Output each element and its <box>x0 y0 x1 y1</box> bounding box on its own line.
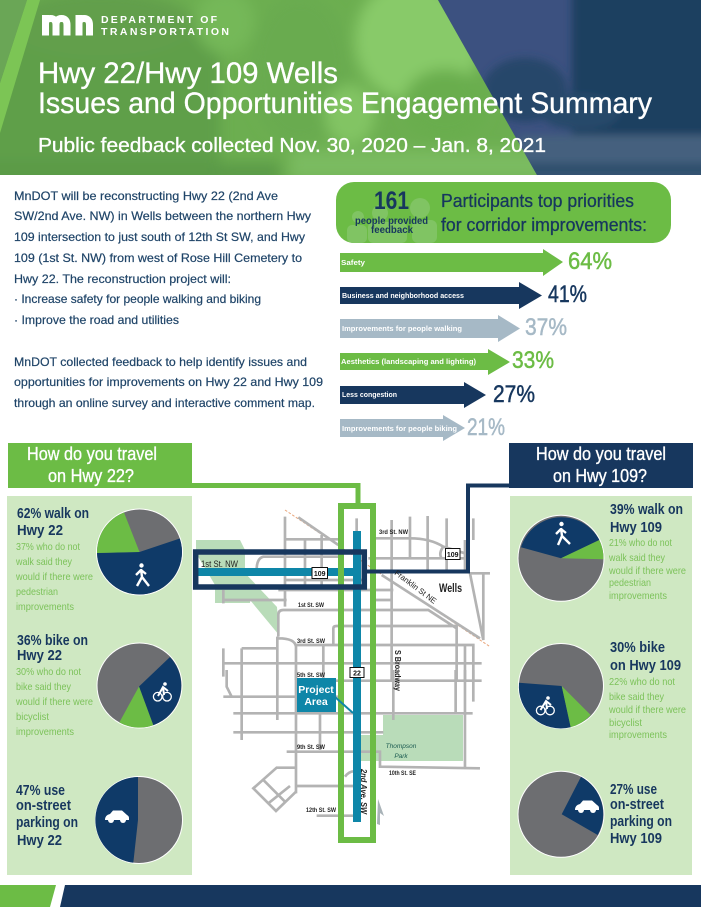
heading box: Hwy 22: on Hwy 22? <box>48 466 134 486</box>
arrow bar: Less congestion 27%: 27% <box>493 381 535 408</box>
pie chart: Hwy 22 biking <box>96 642 182 728</box>
intro text block: · Improve the road and utilities <box>14 313 179 327</box>
stat: 62% walk on Hwy 22: Hwy 22 <box>17 522 63 539</box>
stat: 47% on-street parking on Hwy 22 <box>16 782 78 849</box>
arrow bar: Aesthetics 33% <box>340 347 554 375</box>
map street labels: 3rd St. NW <box>379 529 409 536</box>
stat: 30% bike on Hwy 109: bicyclist <box>609 717 642 729</box>
stat: 62% walk on Hwy 22: pedestrian <box>16 586 58 598</box>
shield: 22: 22 <box>353 670 361 678</box>
stat: 39% walk on Hwy 109: improvements <box>609 590 667 602</box>
map street labels: 9th St. SW <box>297 744 326 751</box>
footer band <box>0 885 701 907</box>
intro text block: opportunities for improvements on Hwy 22 and Hwy 109 <box>14 375 323 389</box>
priorities heading: for corridor improvements: <box>441 215 647 235</box>
shield: 109 on 1st St <box>312 568 328 578</box>
arrow bar: Aesthetics 33%: 33% <box>512 347 554 374</box>
stat: 36% bike on Hwy 22: 36% bike on <box>17 632 88 649</box>
map street labels: 5th St. SW <box>297 672 326 679</box>
icon: mn arches <box>46 15 90 36</box>
panel: Hwy 109 background <box>510 496 692 875</box>
stat: 36% bike on Hwy 22 <box>15 632 93 738</box>
stat: 27% on-street parking on Hwy 109: Hwy 109 <box>610 830 662 847</box>
callout: project area <box>297 678 353 713</box>
stat: 30% bike on Hwy 109 <box>608 639 686 741</box>
stat: 36% bike on Hwy 22: 30% who do not <box>16 666 81 678</box>
pie chart: Hwy 22 parking <box>95 776 183 864</box>
heading box: Hwy 109: How do you travel <box>536 444 666 464</box>
heading box: Hwy 22: How do you travel <box>27 444 157 464</box>
map street labels: Franklin St NE <box>393 568 438 606</box>
intro text block: through an online survey and interactive comment map. <box>14 396 315 410</box>
icon: car <box>105 810 129 823</box>
stat: 62% walk on Hwy 22: 62% walk on <box>17 505 89 522</box>
stat: 47% on-street parking on Hwy 22: 47% use <box>16 782 65 799</box>
map roads upper <box>223 510 490 680</box>
people count: people provided <box>355 216 428 227</box>
heading box: Hwy 109 <box>509 443 693 488</box>
stat: 47% on-street parking on Hwy 22: on-street <box>16 797 71 814</box>
shield: 109 north east: 109 <box>447 552 459 559</box>
title: Issues and Opportunities Engagement Summary <box>38 87 652 120</box>
title <box>38 57 652 120</box>
arrow bar: Business and neighborhood access 41%: 41% <box>548 281 587 308</box>
stat: 36% bike on Hwy 22: bike said they <box>16 681 72 693</box>
logo: MnDOT Department of Transportation: DEPARTMENT OF <box>101 14 218 26</box>
map street labels: Wells <box>439 583 462 595</box>
pie chart: Hwy 109 biking <box>518 643 604 729</box>
intro text block: MnDOT collected feedback to help identify issues and <box>14 355 307 369</box>
pie chart: Hwy 22 walking <box>96 508 183 596</box>
stat: 62% walk on Hwy 22 <box>15 505 93 613</box>
stat: 47% on-street parking on Hwy 22: Hwy 22 <box>17 832 62 849</box>
icon: cyclist <box>153 682 171 701</box>
stat: 27% on-street parking on Hwy 109: parking on <box>610 813 672 830</box>
arrow bar: Safety 64%: Safety <box>341 258 366 267</box>
arrow bar: Improvements for people biking 21%: Improvements for people biking <box>342 424 457 433</box>
icon: walker <box>556 522 570 545</box>
stat: 30% bike on Hwy 109: 30% bike <box>610 639 665 656</box>
stat: 62% walk on Hwy 22: 37% who do not <box>16 541 80 553</box>
stat: 27% on-street parking on Hwy 109 <box>610 781 672 847</box>
map box: Hwy 22 corridor <box>341 506 373 840</box>
pie chart: Hwy 109 walking <box>518 515 604 602</box>
arrow bar: Less congestion 27%: Less congestion <box>342 390 397 399</box>
intro text block: 109 intersection to just south of 12th St SW, and Hwy <box>14 230 305 244</box>
highway 109 corridor line <box>198 568 360 576</box>
priorities heading: Participants top priorities <box>441 191 634 211</box>
stat: 30% bike on Hwy 109: improvements <box>609 729 667 741</box>
stat: 39% walk on Hwy 109: pedestrian <box>609 577 651 589</box>
icon: walker <box>136 563 149 586</box>
logo: MnDOT Department of Transportation: TRANSPORTATION <box>101 26 229 38</box>
stat: 30% bike on Hwy 109: on Hwy 109 <box>610 657 681 674</box>
intro text block <box>14 189 323 410</box>
pie chart: Hwy 109 parking <box>518 771 604 858</box>
icon: car <box>575 800 599 813</box>
map street labels: 10th St. SE <box>389 770 417 777</box>
heading box: Hwy 22 <box>8 443 192 488</box>
priorities heading <box>441 191 647 235</box>
arrow bar: Improvements for people biking 21%: 21% <box>467 414 505 441</box>
arrow bar: Safety 64%: 64% <box>568 248 612 275</box>
arrow bar: Improvements for people walking 37%: 37% <box>525 314 567 341</box>
heading box: Hwy 109: on Hwy 109? <box>553 466 647 486</box>
panel: Hwy 22 background <box>7 496 192 875</box>
stat: 36% bike on Hwy 22: bicyclist <box>16 711 49 723</box>
arrow bar: Business and neighborhood access 41%: Business and neighborhood access <box>342 291 464 300</box>
callout: project area: Project <box>298 684 334 696</box>
stat: 47% on-street parking on Hwy 22: parking on <box>16 814 78 831</box>
arrow bar: Business and neighborhood access 41% <box>340 281 587 309</box>
stat: 39% walk on Hwy 109: would if there were <box>608 565 686 577</box>
map <box>192 486 509 840</box>
shield: 109 north east <box>446 548 460 560</box>
arrow bar: Safety 64% <box>340 248 612 276</box>
stat: 27% on-street parking on Hwy 109: 27% use <box>610 781 657 798</box>
arrow bar: Improvements for people walking 37% <box>340 314 567 342</box>
intro text block: SW/2nd Ave. NW) in Wells between the northern Hwy <box>14 209 311 223</box>
callout: project area: Area <box>304 696 328 708</box>
panel: participant count and priorities heading <box>336 182 671 243</box>
map street labels: S Broadway <box>393 650 402 691</box>
icon: cyclist <box>536 696 554 715</box>
intro text block: MnDOT will be reconstructing Hwy 22 (2nd Ave <box>14 189 278 203</box>
stat: 30% bike on Hwy 109: bike said they <box>609 691 665 703</box>
title: Hwy 22/Hwy 109 Wells <box>38 57 338 90</box>
intro text block: · Increase safety for people walking and biking <box>14 292 261 306</box>
map street labels <box>201 529 462 815</box>
connector: Hwy 22 title to map box <box>192 486 358 505</box>
stat: 27% on-street parking on Hwy 109: on-street <box>610 796 664 813</box>
arrow bar: Improvements for people walking 37%: Improvements for people walking <box>342 324 462 333</box>
map street labels: Thompson <box>386 743 417 750</box>
arrow bar: Aesthetics 33%: Aesthetics (landscaping and lighting) <box>341 357 476 366</box>
stat: 62% walk on Hwy 22: improvements <box>16 601 74 613</box>
map street labels: 12th St. SW <box>306 807 337 814</box>
map street labels: 1st St. SW <box>298 602 325 609</box>
map street labels: 1st St. NW <box>201 559 238 570</box>
icon: people silhouettes <box>347 198 437 243</box>
subtitle: Public feedback collected Nov. 30, 2020 – Jan. 8, 2021 <box>38 135 546 157</box>
people count: feedback <box>371 225 413 236</box>
stat: 30% bike on Hwy 109: would if there were <box>608 704 686 716</box>
stat: 36% bike on Hwy 22: would if there were <box>15 696 93 708</box>
stat: 36% bike on Hwy 22: improvements <box>16 726 74 738</box>
stat: 39% walk on Hwy 109: 21% who do not <box>609 537 672 549</box>
map street labels: Park <box>394 753 408 760</box>
stat: 62% walk on Hwy 22: walk said they <box>15 556 73 568</box>
people count <box>355 187 428 236</box>
arrow bar: Less congestion 27% <box>340 381 535 408</box>
highway 22 corridor line <box>353 531 361 822</box>
stat: 39% walk on Hwy 109 <box>608 501 686 602</box>
people count: 161 <box>374 187 409 215</box>
map street labels: 3rd St. SW <box>297 638 326 645</box>
stat: 39% walk on Hwy 109: Hwy 109 <box>610 519 662 536</box>
intro text block: Hwy 22. The reconstruction project will: <box>14 272 231 286</box>
map street labels: 2nd Ave. SW <box>359 768 368 815</box>
shield: 109 on 1st St: 109 <box>314 571 326 578</box>
header banner with photo overlay <box>0 0 701 190</box>
stat: 30% bike on Hwy 109: 22% who do not <box>609 676 675 688</box>
map roads lower <box>223 670 482 816</box>
icon: north arrow <box>377 799 384 825</box>
stat: 39% walk on Hwy 109: walk said they <box>608 552 666 564</box>
connector: Hwy 109 title to map box <box>366 486 509 572</box>
arrow bar: Improvements for people biking 21% <box>340 414 505 441</box>
logo: MnDOT Department of Transportation <box>46 14 229 38</box>
stat: 36% bike on Hwy 22: Hwy 22 <box>17 647 62 664</box>
map box: Hwy 109 corridor <box>196 552 364 587</box>
map parks <box>196 540 463 761</box>
stat: 39% walk on Hwy 109: 39% walk on <box>610 501 683 518</box>
intro text block: 109 (1st St. NW) from west of Rose Hill Cemetery to <box>14 251 302 265</box>
shield: 22 <box>350 668 364 678</box>
stat: 62% walk on Hwy 22: would if there were <box>15 571 93 583</box>
